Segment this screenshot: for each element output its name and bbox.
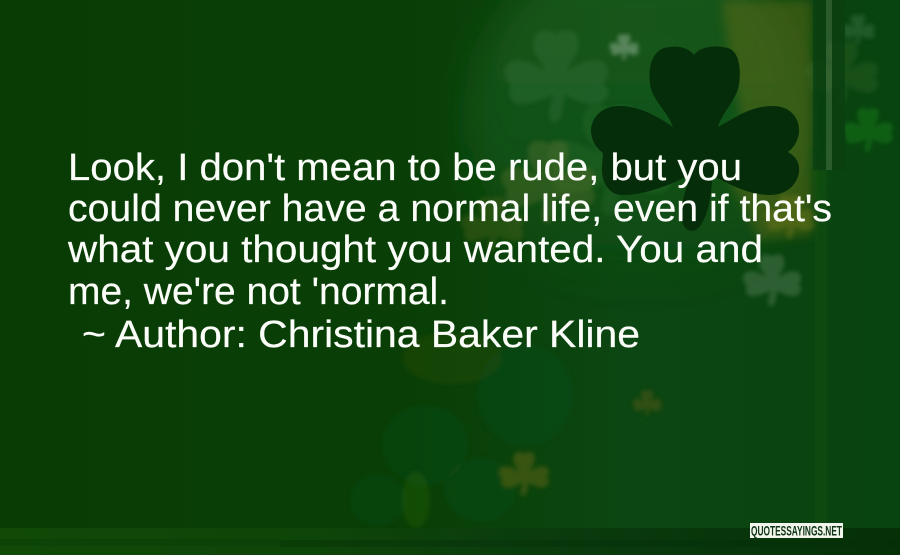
- green glow behind shamrocks: [470, 0, 810, 295]
- faint shamrock top: [504, 30, 608, 122]
- watermark badge: [750, 522, 843, 538]
- olive shamrock right: [765, 195, 815, 239]
- dim olive leaf lower: [402, 472, 430, 528]
- quote line 3: what you thought you wanted. You and: [67, 229, 763, 271]
- watermark badge: QUOTESSAYINGS.NET: [751, 522, 842, 538]
- dim leaf centre low: [444, 458, 516, 522]
- quote line 4: me, we're not 'normal.: [68, 271, 449, 313]
- dim green heart lower: [382, 405, 468, 485]
- quote text: [67, 147, 832, 313]
- pale shamrock under quote: [743, 255, 801, 306]
- faint background shamrocks: [350, 15, 893, 528]
- shamrock far right: [806, 41, 878, 105]
- pale small shamrock top: [609, 34, 639, 60]
- vertical stripes: [813, 0, 845, 555]
- olive heart left: [501, 140, 595, 223]
- pale green shamrock behind main: [548, 105, 672, 216]
- author attribution: ~ Author: Christina Baker Kline: [82, 314, 640, 356]
- small orange club: [632, 390, 662, 416]
- icon: large dark shamrock: [591, 46, 799, 231]
- dim brown wash lower: [402, 332, 502, 384]
- dim green leaf centre: [477, 343, 573, 447]
- horizontal bottom band: [0, 528, 900, 555]
- dim leaf lower: [350, 474, 406, 526]
- bright green shamrock: [843, 108, 893, 152]
- quote line 1: Look, I don't mean to be rude, but you: [68, 147, 742, 189]
- orange club: [499, 452, 549, 496]
- quote line 2: could never have a normal life, even if that's: [68, 188, 832, 230]
- olive yellow wash: [722, 0, 812, 240]
- orange brown leaf: [461, 197, 523, 252]
- pale heart right: [841, 15, 875, 44]
